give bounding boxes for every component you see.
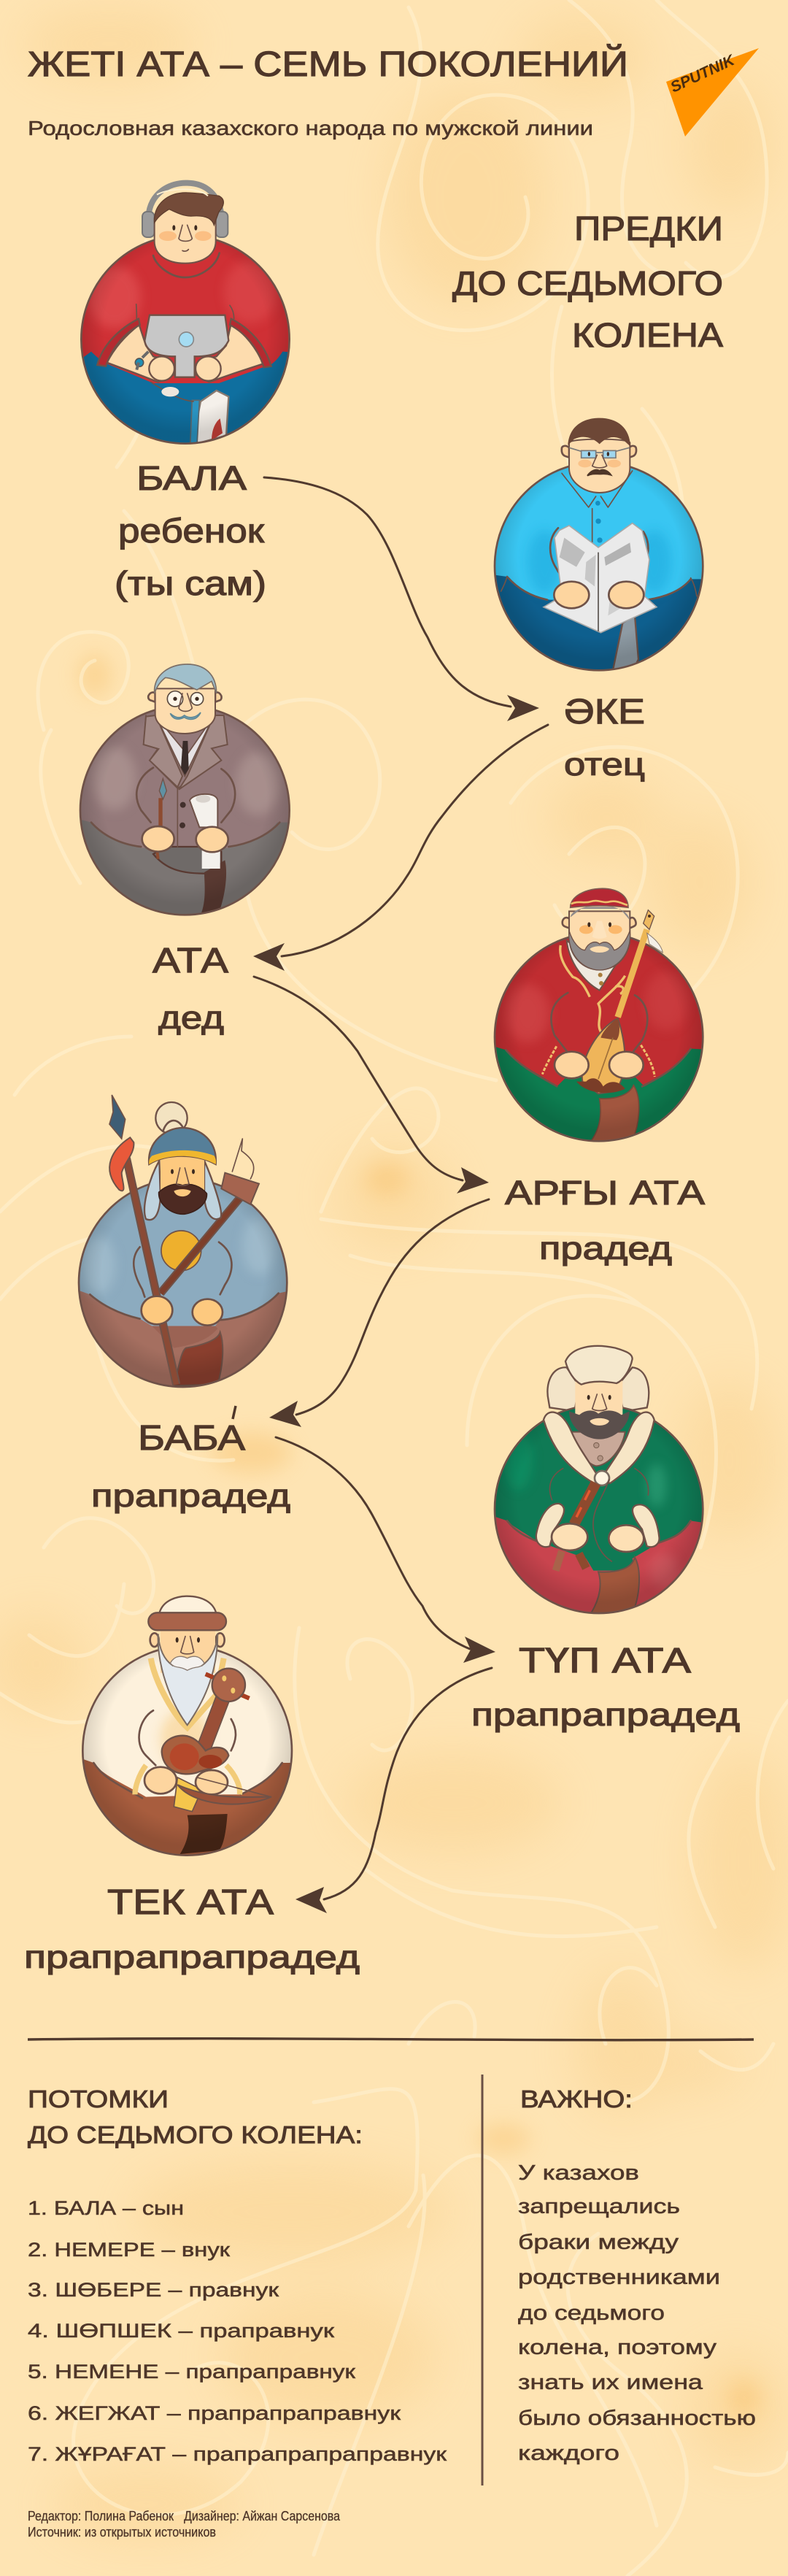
heading: descendants — [28, 2085, 363, 2148]
panel: important note: каждого — [518, 2442, 619, 2465]
horizontal divider — [28, 2039, 754, 2040]
label: ТҮП АТА — [471, 1642, 740, 1733]
arrow: Әке to Ата — [253, 725, 548, 971]
heading: ancestors: ПРЕДКИ — [574, 209, 723, 247]
label: АРҒЫ АТА: прадед — [539, 1231, 672, 1266]
title: ЖЕТІ АТА – СЕМЬ ПОКОЛЕНИЙ — [28, 44, 628, 84]
label: ӘКЕ: отец — [564, 747, 645, 783]
label: БАБА — [91, 1406, 290, 1514]
heading: descendants: ПОТОМКИ — [28, 2085, 169, 2112]
label: ТҮП АТА: ТҮП АТА — [519, 1642, 691, 1680]
panel: important note: У казахов — [518, 2161, 639, 2185]
label: БАБА: БАБА — [138, 1419, 245, 1458]
panel: important note — [518, 2085, 756, 2465]
list of descendants: 1. БАЛА – сын — [28, 2197, 184, 2219]
list of descendants: 5. НЕМЕНЕ – прапраправнук — [28, 2361, 355, 2383]
credits — [28, 2509, 341, 2540]
figure: Bala (child with laptop) — [73, 183, 299, 453]
logo: Sputnik — [666, 48, 759, 137]
heading: ancestors — [452, 209, 723, 354]
label: ТЕК АТА — [24, 1883, 360, 1975]
vertical divider — [482, 2075, 483, 2485]
subtitle: Родословная казахского народа по мужской линии — [28, 117, 593, 139]
panel: important note: было обязанностью — [518, 2407, 756, 2430]
logo: Sputnik: SPUTNIK — [668, 51, 738, 96]
panel: important note: родственниками — [518, 2266, 720, 2289]
list of descendants: 4. ШӨПШЕК – праправнук — [28, 2320, 334, 2342]
list of descendants — [28, 2197, 447, 2465]
label: БАЛА: ребенок — [118, 512, 265, 550]
label: АТА: дед — [158, 1000, 224, 1036]
panel: descendants — [28, 2085, 447, 2465]
credits: Источник: из открытых источников — [28, 2525, 216, 2540]
label: БАЛА — [115, 459, 266, 602]
panel: important note: знать их имена — [518, 2371, 703, 2394]
arrow: Арғы ата to Баба — [269, 1199, 489, 1427]
label: БАБА: прапрадед — [91, 1478, 290, 1514]
label: ТЕК АТА: ТЕК АТА — [107, 1883, 274, 1922]
figure: Тек ата (elder with kobyz) — [73, 1596, 299, 1860]
figure: Әке (father with newspaper) — [489, 418, 715, 677]
label: АРҒЫ АТА: АРҒЫ АТА — [505, 1174, 705, 1212]
label: ӘКЕ — [564, 693, 645, 783]
list of descendants: 7. ЖҰРАҒАТ – прапрапрапраправнук — [28, 2443, 447, 2465]
label: ТЕК АТА: прапрапрапрадед — [24, 1939, 360, 1975]
arrow: Бала to Әке — [264, 477, 539, 721]
label: ӘКЕ: ӘКЕ — [564, 693, 645, 731]
label: АТА — [152, 942, 228, 1036]
arrow: Баба to Түп ата — [276, 1437, 495, 1663]
figure: Ата (grandfather in suit) — [73, 664, 299, 925]
panel: important note: до седьмого — [518, 2302, 665, 2325]
credits: Редактор: Полина Рабенок — [28, 2509, 174, 2523]
label: АТА: АТА — [152, 942, 228, 980]
heading: ancestors: КОЛЕНА — [572, 316, 723, 354]
figure: Түп ата (man in fur hat) — [489, 1346, 715, 1619]
figure: Баба (warrior with spear) — [69, 1095, 296, 1389]
list of descendants: 2. НЕМЕРЕ – внук — [28, 2239, 230, 2261]
credits: Дизайнер: Айжан Сарсенова — [184, 2509, 341, 2523]
list of descendants: 3. ШӨБЕРЕ – правнук — [28, 2279, 279, 2301]
panel: important note: браки между — [518, 2231, 679, 2254]
figure: Арғы ата (great-grandfather with dombra) — [489, 888, 715, 1147]
panel: important note: колена, поэтому — [518, 2336, 717, 2359]
arrow: Ата to Арғы ата — [254, 977, 489, 1193]
list of descendants: 6. ЖЕГЖАТ – прапрапраправнук — [28, 2402, 401, 2424]
panel: important note: ВАЖНО: — [520, 2085, 633, 2112]
arrow: Түп ата to Тек ата — [296, 1668, 492, 1913]
label: ТҮП АТА: прапрапрадед — [471, 1697, 740, 1733]
heading: descendants: ДО СЕДЬМОГО КОЛЕНА: — [28, 2121, 363, 2148]
heading: ancestors: ДО СЕДЬМОГО — [452, 264, 723, 302]
label: БАЛА: БАЛА — [136, 459, 247, 497]
label: БАЛА: (ты сам) — [115, 564, 266, 602]
panel: important note: запрещались — [518, 2195, 680, 2218]
label: АРҒЫ АТА — [505, 1174, 705, 1266]
